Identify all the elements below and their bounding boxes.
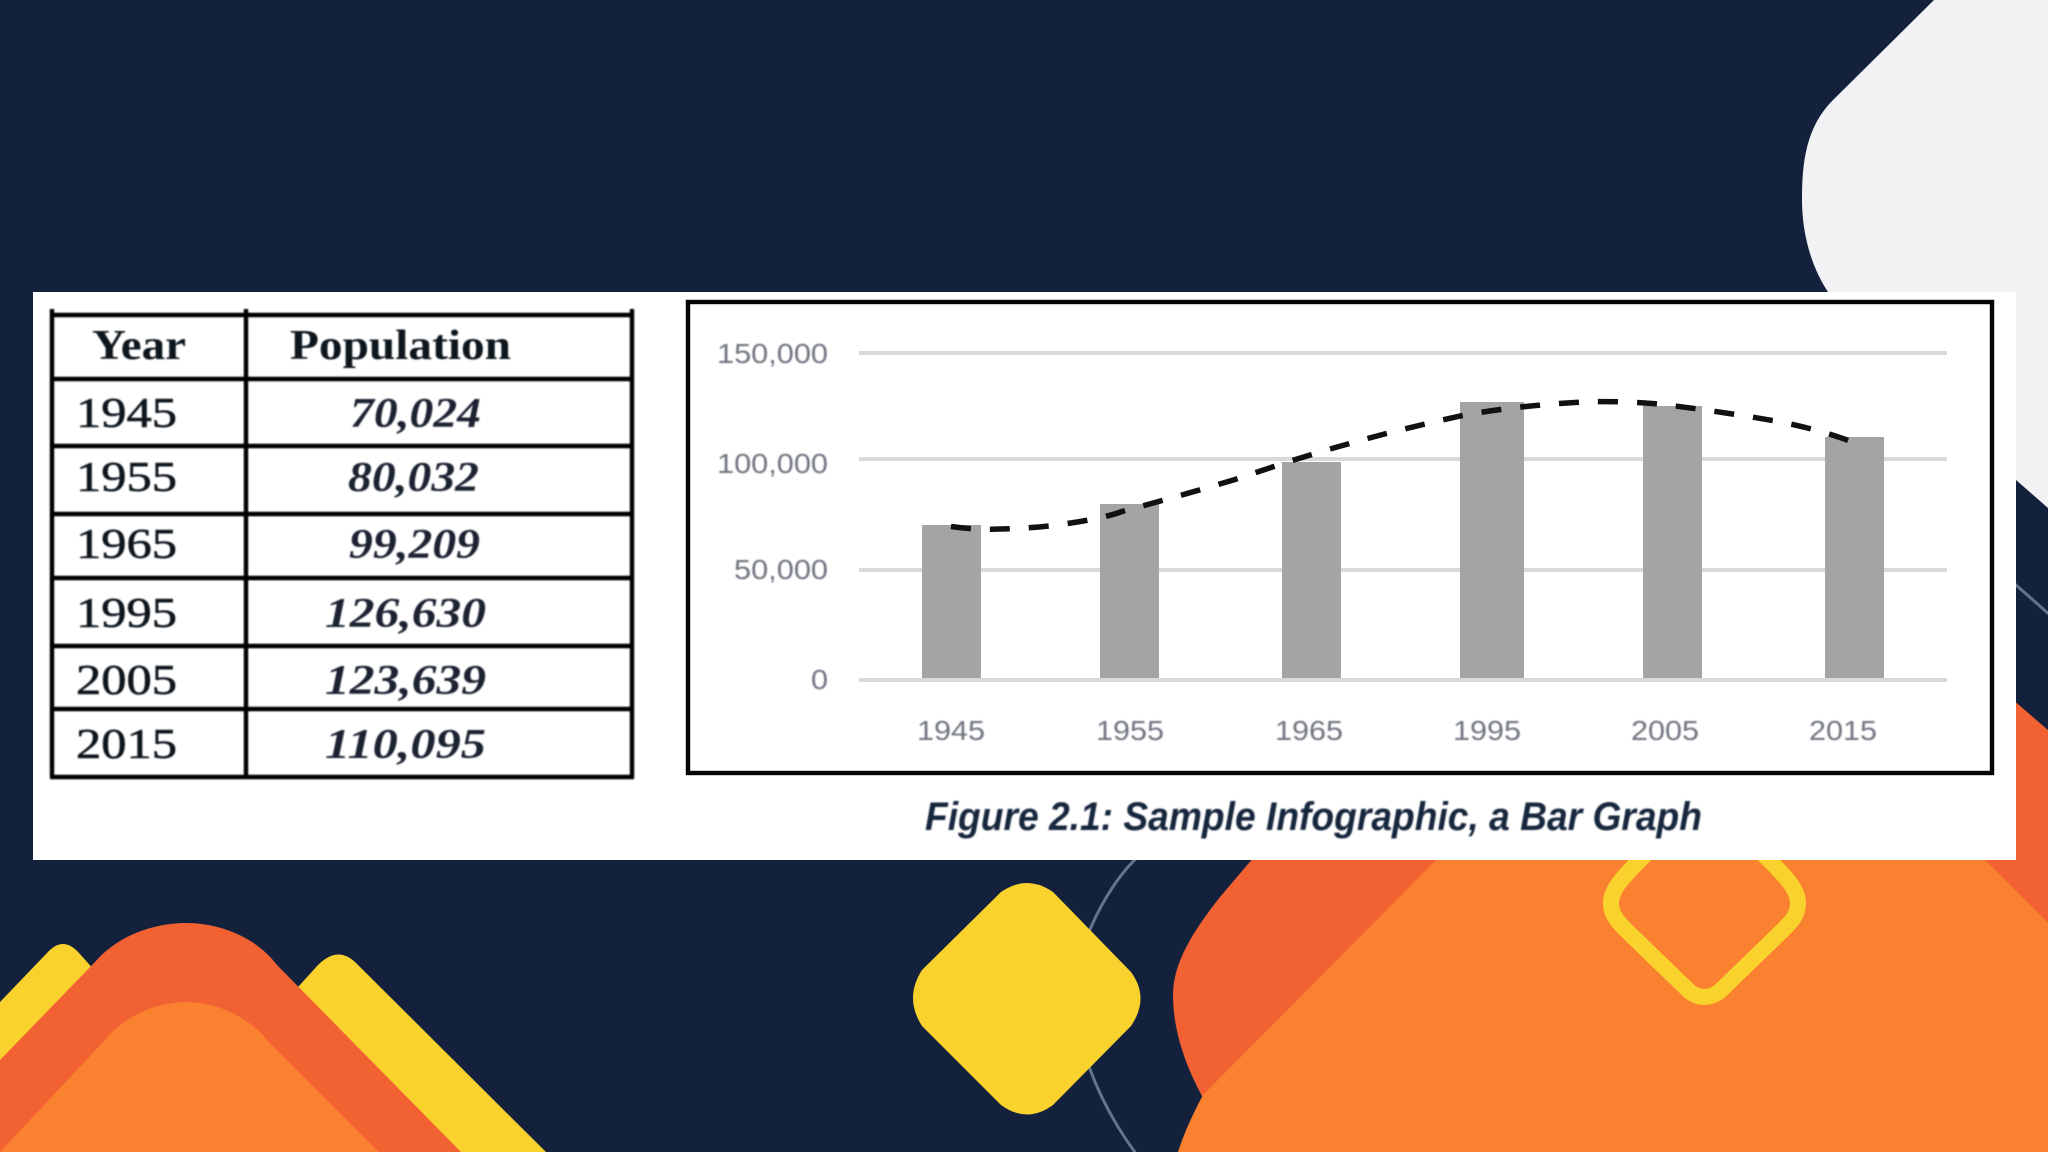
- y axis labels: 150,000: [717, 338, 828, 369]
- shape: red-orange rounded blob: [1173, 850, 1460, 1098]
- shape: large orange block: [1178, 846, 2048, 1152]
- row 2015: [76, 722, 486, 768]
- row 1945: 1945: [76, 391, 177, 437]
- row 1945: [76, 391, 481, 437]
- row 2015: 110,095: [325, 722, 486, 768]
- table header: [92, 323, 511, 369]
- y axis labels: 100,000: [717, 448, 828, 479]
- gridlines: [859, 353, 1947, 680]
- x axis labels: 1995: [1453, 715, 1521, 746]
- x axis labels: 2005: [1631, 715, 1699, 746]
- table header: Year: [92, 323, 186, 369]
- table: year and population: [50, 309, 634, 777]
- x axis labels: 1955: [1096, 715, 1164, 746]
- shape: red-orange right block: [1960, 680, 2048, 940]
- x axis labels: 1965: [1275, 715, 1343, 746]
- row 1965: [76, 522, 480, 568]
- shape: large yellow diamond: [913, 883, 1140, 1114]
- row 2005: 2005: [76, 658, 177, 704]
- row 1955: [76, 455, 479, 501]
- shape: yellow outlined diamond: [1611, 850, 1798, 997]
- x axis labels: 2015: [1809, 715, 1877, 746]
- line: thin circle arc: [1075, 855, 1140, 1152]
- table grid: [50, 309, 634, 777]
- y axis labels: [717, 338, 828, 695]
- row 1995: 1995: [76, 591, 177, 637]
- x axis labels: [917, 715, 1877, 746]
- row 2005: 123,639: [325, 658, 486, 704]
- shape: orange peak: [0, 1002, 379, 1152]
- row 1995: [76, 591, 486, 637]
- caption: Figure 2.1: Sample Infographic, a Bar Graph: [925, 795, 1702, 839]
- row 2005: [76, 658, 486, 704]
- chart frame: [688, 302, 1992, 773]
- line: thin arc right edge: [2000, 571, 2048, 615]
- shape: yellow left peak: [0, 944, 130, 1100]
- dashed trend line: [951, 402, 1852, 529]
- row 1945: 70,024: [350, 391, 481, 437]
- shape: bottom-left mountain group: [0, 923, 546, 1152]
- shape: light rounded diamond top right: [1802, 0, 2048, 508]
- shape: yellow right peak: [250, 954, 546, 1152]
- row 2015: 2015: [76, 722, 177, 768]
- row 1995: 126,630: [325, 591, 486, 637]
- row 1965: 1965: [76, 522, 177, 568]
- y axis labels: 50,000: [734, 554, 828, 585]
- shape: red-orange peak: [0, 923, 461, 1152]
- row 1965: 99,209: [349, 522, 480, 568]
- row 1955: 80,032: [348, 455, 479, 501]
- table header: Population: [290, 323, 511, 369]
- x axis labels: 1945: [917, 715, 985, 746]
- y axis labels: 0: [811, 664, 828, 695]
- bar chart: [688, 302, 1992, 773]
- row 1955: 1955: [76, 455, 177, 501]
- panel: white content card: [33, 292, 2016, 860]
- bars: [922, 402, 1884, 678]
